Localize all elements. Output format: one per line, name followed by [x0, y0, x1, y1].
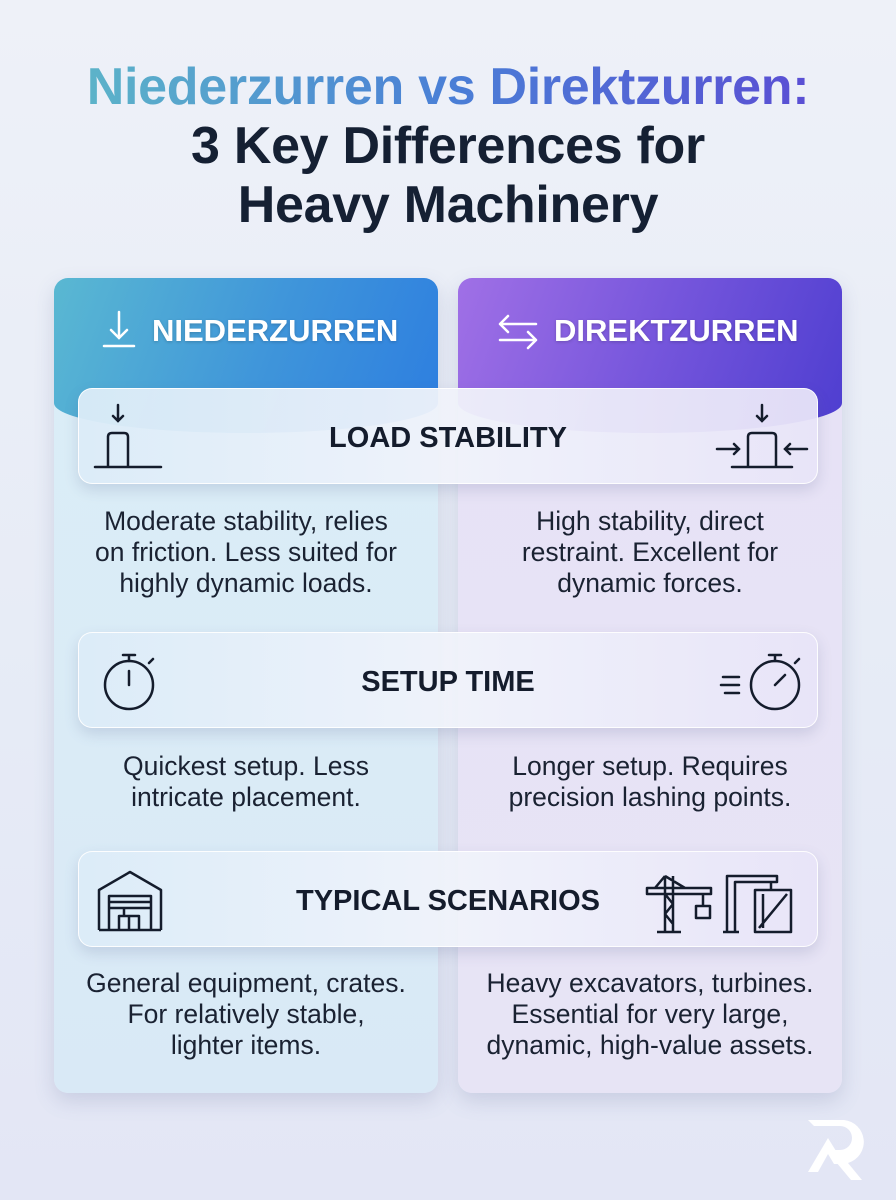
text: direktzurren setup: [509, 751, 791, 812]
icon: cranes: [646, 874, 792, 934]
logo: [808, 1120, 864, 1180]
icon: warehouse: [98, 870, 162, 932]
icon: stopwatch: [104, 654, 154, 710]
text: niederzurren scenarios: For relatively stable,: [127, 999, 365, 1029]
text: direktzurren scenarios: [486, 968, 814, 1060]
text: niederzurren scenarios: General equipment, crates.: [86, 968, 406, 998]
band: typical scenarios: [78, 851, 818, 947]
icon: fast stopwatch: [720, 654, 800, 710]
title: Niederzurren vs Direktzurren:: [87, 58, 809, 116]
text: niederzurren stability: Moderate stability, relies: [104, 506, 388, 536]
band: load stability: [78, 388, 818, 484]
text: niederzurren stability: highly dynamic loads.: [119, 568, 373, 598]
text: direktzurren scenarios: dynamic, high-value assets.: [486, 1030, 814, 1060]
text: niederzurren setup: intricate placement.: [131, 782, 361, 812]
text: direktzurren stability: [522, 506, 778, 598]
band: setup time: [78, 632, 818, 728]
title: [87, 58, 809, 234]
header: Direktzurren: [458, 278, 842, 433]
panel: Direktzurren column: [458, 278, 842, 1093]
text: niederzurren stability: [95, 506, 397, 598]
icon: load down: [94, 404, 162, 468]
text: direktzurren stability: restraint. Excellent for: [522, 537, 778, 567]
title: Heavy Machinery: [238, 176, 658, 234]
icon: down arrow: [102, 310, 136, 348]
text: direktzurren setup: precision lashing points.: [509, 782, 791, 812]
title: 3 Key Differences for: [191, 117, 705, 175]
icon: load restrained: [716, 404, 808, 468]
text: direktzurren scenarios: Essential for very large,: [512, 999, 788, 1029]
panel: Niederzurren column: [54, 278, 438, 1093]
band: setup time: SETUP TIME: [361, 666, 535, 698]
header: Direktzurren: DIREKTZURREN: [554, 313, 799, 348]
band: typical scenarios: TYPICAL SCENARIOS: [296, 885, 600, 917]
text: direktzurren stability: High stability, direct: [536, 506, 764, 536]
header: Niederzurren: NIEDERZURREN: [152, 313, 398, 348]
text: niederzurren scenarios: lighter items.: [171, 1030, 321, 1060]
text: direktzurren stability: dynamic forces.: [557, 568, 743, 598]
text: direktzurren setup: Longer setup. Requires: [512, 751, 788, 781]
text: niederzurren stability: on friction. Less suited for: [95, 537, 397, 567]
text: niederzurren setup: [123, 751, 369, 812]
icon: exchange arrows: [498, 314, 538, 350]
text: niederzurren scenarios: [86, 968, 406, 1060]
header: Niederzurren: [54, 278, 438, 433]
text: direktzurren scenarios: Heavy excavators, turbines.: [486, 968, 813, 998]
band: load stability: LOAD STABILITY: [329, 422, 567, 454]
text: niederzurren setup: Quickest setup. Less: [123, 751, 369, 781]
